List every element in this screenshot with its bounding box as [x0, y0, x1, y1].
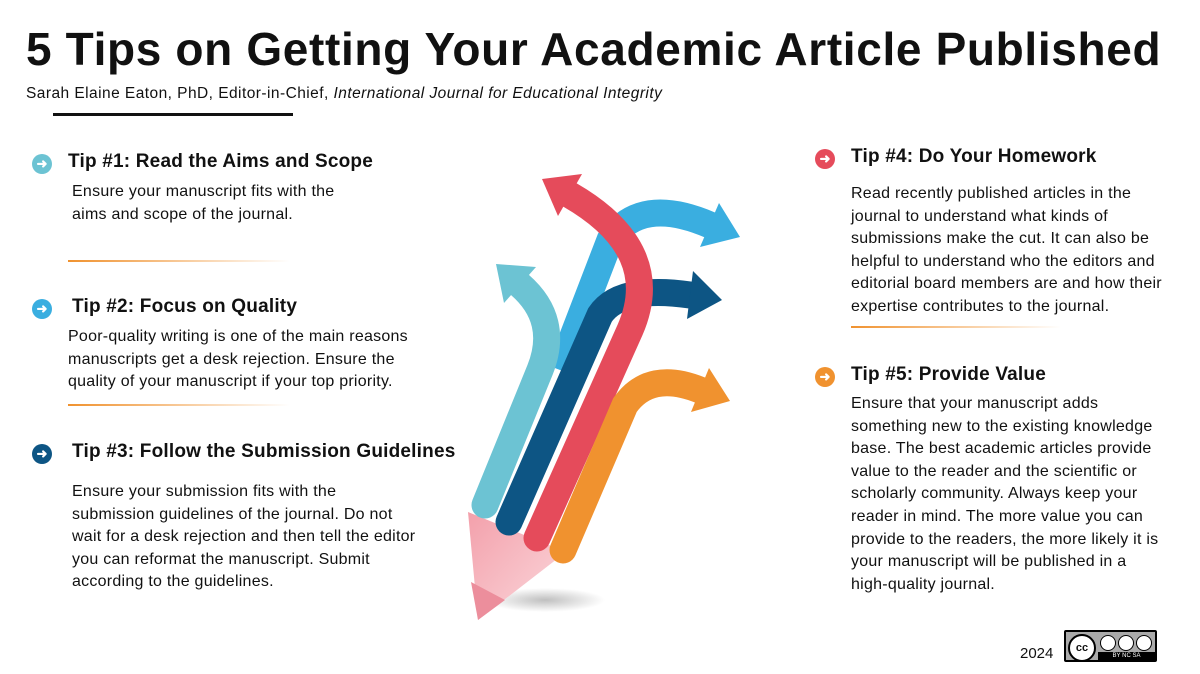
icon: arrow red: ➜: [820, 151, 830, 166]
icon: arrow navy: [32, 444, 52, 464]
license badge: BY NC SA: [1113, 653, 1140, 659]
tip4 body: helpful to understand who the editors and: [851, 253, 1155, 270]
tip3 body: wait for a desk rejection and then tell the editor: [72, 528, 415, 545]
icon: arrow blue: [32, 299, 52, 319]
tip4 body: submissions make the cut. It can also be: [851, 230, 1149, 247]
tip5 body: high-quality journal.: [851, 576, 995, 593]
tip5 body: base. The best academic articles provide: [851, 440, 1152, 457]
tip2 body: quality of your manuscript if your top priority.: [68, 373, 393, 390]
tip 5: [815, 364, 1158, 593]
tip5 body: something new to the existing knowledge: [851, 418, 1152, 435]
tip4 heading: Tip #4: Do Your Homework: [851, 146, 1097, 167]
tip4 body: editorial board members are and how their: [851, 275, 1162, 292]
arrow blue: [560, 203, 740, 370]
tip4 body: [850, 185, 1162, 315]
tip1 body: Ensure your manuscript fits with the: [72, 183, 334, 200]
tip 2: [32, 296, 408, 390]
tip4 body: journal to understand what kinds of: [851, 208, 1108, 225]
tip3 heading: Tip #3: Follow the Submission Guidelines: [72, 441, 455, 462]
tip4 body: Read recently published articles in the: [851, 185, 1131, 202]
tip5 body: value to the reader and the scientific or: [851, 463, 1137, 480]
tip5 heading: Tip #5: Provide Value: [851, 364, 1046, 385]
tip2 body: [68, 328, 408, 390]
arrow red: [537, 174, 639, 538]
license badge: cc: [1076, 642, 1088, 654]
title: 5 Tips on Getting Your Academic Article Published: [26, 23, 1161, 75]
license badge: [1064, 630, 1157, 662]
tip2 heading: Tip #2: Focus on Quality: [72, 296, 297, 317]
tip3 body: Ensure your submission fits with the: [72, 483, 336, 500]
tip3 body: [72, 483, 415, 590]
subtitle: Sarah Elaine Eaton, PhD, Editor-in-Chief, International Journal for Educational Integrity: [26, 85, 662, 102]
tip2 body: Poor-quality writing is one of the main reasons: [68, 328, 408, 345]
tip5 body: reader in mind. The more value you can: [851, 508, 1143, 525]
tip5 body: provide to the readers, the more likely it is: [851, 531, 1158, 548]
icon: arrow teal: [32, 154, 52, 174]
tip5 body: your manuscript will be published in a: [851, 553, 1126, 570]
icon: arrow red: [815, 149, 835, 169]
icon: arrow teal: ➜: [37, 156, 47, 171]
tip1 heading: Tip #1: Read the Aims and Scope: [68, 151, 373, 172]
arrow navy: [509, 271, 722, 522]
tip3 body: you can reformat the manuscript. Submit: [72, 551, 370, 568]
icon: arrow navy: ➜: [37, 446, 47, 461]
tip4 body: expertise contributes to the journal.: [851, 298, 1109, 315]
icon: arrow orange: ➜: [820, 369, 830, 384]
tip2 body: manuscripts get a desk rejection. Ensure the: [68, 351, 395, 368]
tip 3: [32, 441, 455, 590]
tip 4: [815, 146, 1162, 315]
arrow teal: [485, 264, 547, 505]
tip 1: [32, 151, 373, 223]
tip1 body: aims and scope of the journal.: [72, 206, 293, 223]
icon: arrow orange: [815, 367, 835, 387]
pencil tip: [468, 512, 566, 620]
tip1 body: [72, 183, 334, 223]
tip3 body: submission guidelines of the journal. Do not: [72, 506, 393, 523]
icon: arrow blue: ➜: [37, 301, 47, 316]
tip5 body: [851, 395, 1158, 593]
year: 2024: [1020, 645, 1053, 662]
tip5 body: Ensure that your manuscript adds: [851, 395, 1098, 412]
tip3 body: according to the guidelines.: [72, 573, 274, 590]
tip5 body: scholarly community. Always keep your: [851, 485, 1137, 502]
arrow orange: [563, 368, 730, 550]
